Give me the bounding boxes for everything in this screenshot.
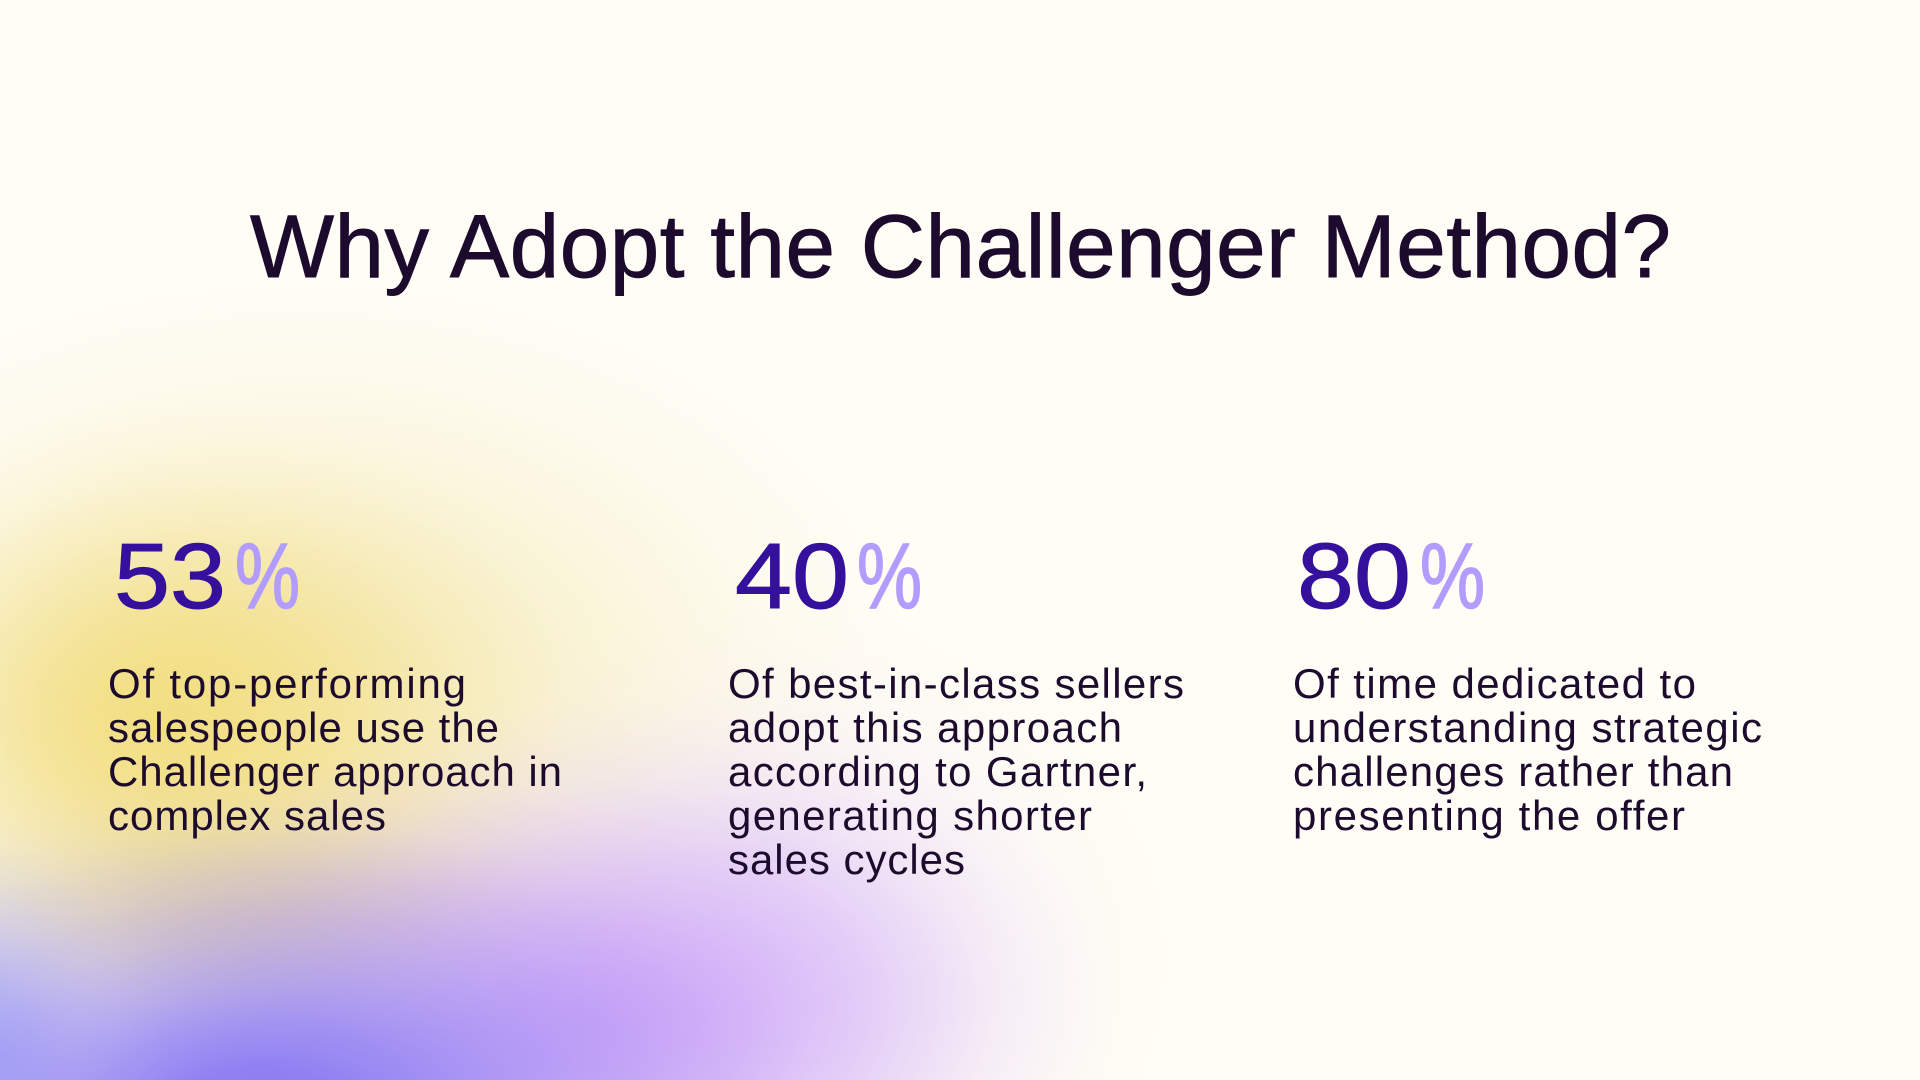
number: 40%: 40: [735, 524, 849, 628]
text: 40% description: according to Gartner,: [728, 748, 1147, 795]
number: 80%: [1297, 524, 1485, 628]
number: 40%: [735, 524, 922, 628]
text: 53% description: Of top-performing: [108, 660, 466, 707]
panel: stat 80%: [1293, 524, 1762, 839]
number: 53%: [114, 524, 300, 628]
text: 53% description: complex sales: [108, 792, 386, 839]
text: 53% description: Challenger approach in: [108, 748, 562, 795]
number: 53%: %: [235, 524, 300, 628]
text: 40% description: [728, 660, 1184, 883]
text: 53% description: salespeople use the: [108, 704, 499, 751]
text: 80% description: understanding strategic: [1293, 704, 1762, 751]
text: 40% description: Of best-in-class sellers: [728, 660, 1184, 707]
text: 80% description: [1293, 660, 1762, 839]
text: 40% description: sales cycles: [728, 836, 965, 883]
text: 80% description: challenges rather than: [1293, 748, 1733, 795]
text: 80% description: Of time dedicated to: [1293, 660, 1696, 707]
number: 80%: %: [1420, 524, 1485, 628]
panel: stat 53%: [108, 524, 562, 839]
text: 40% description: generating shorter: [728, 792, 1092, 839]
text: 53% description: [108, 660, 562, 839]
text: 40% description: adopt this approach: [728, 704, 1122, 751]
number: 53%: 53: [114, 524, 226, 628]
panel: stat 40%: [728, 524, 1184, 883]
number: 80%: 80: [1297, 524, 1411, 628]
title: Why Adopt the Challenger Method?: [250, 196, 1671, 296]
number: 40%: %: [857, 524, 922, 628]
text: 80% description: presenting the offer: [1293, 792, 1685, 839]
